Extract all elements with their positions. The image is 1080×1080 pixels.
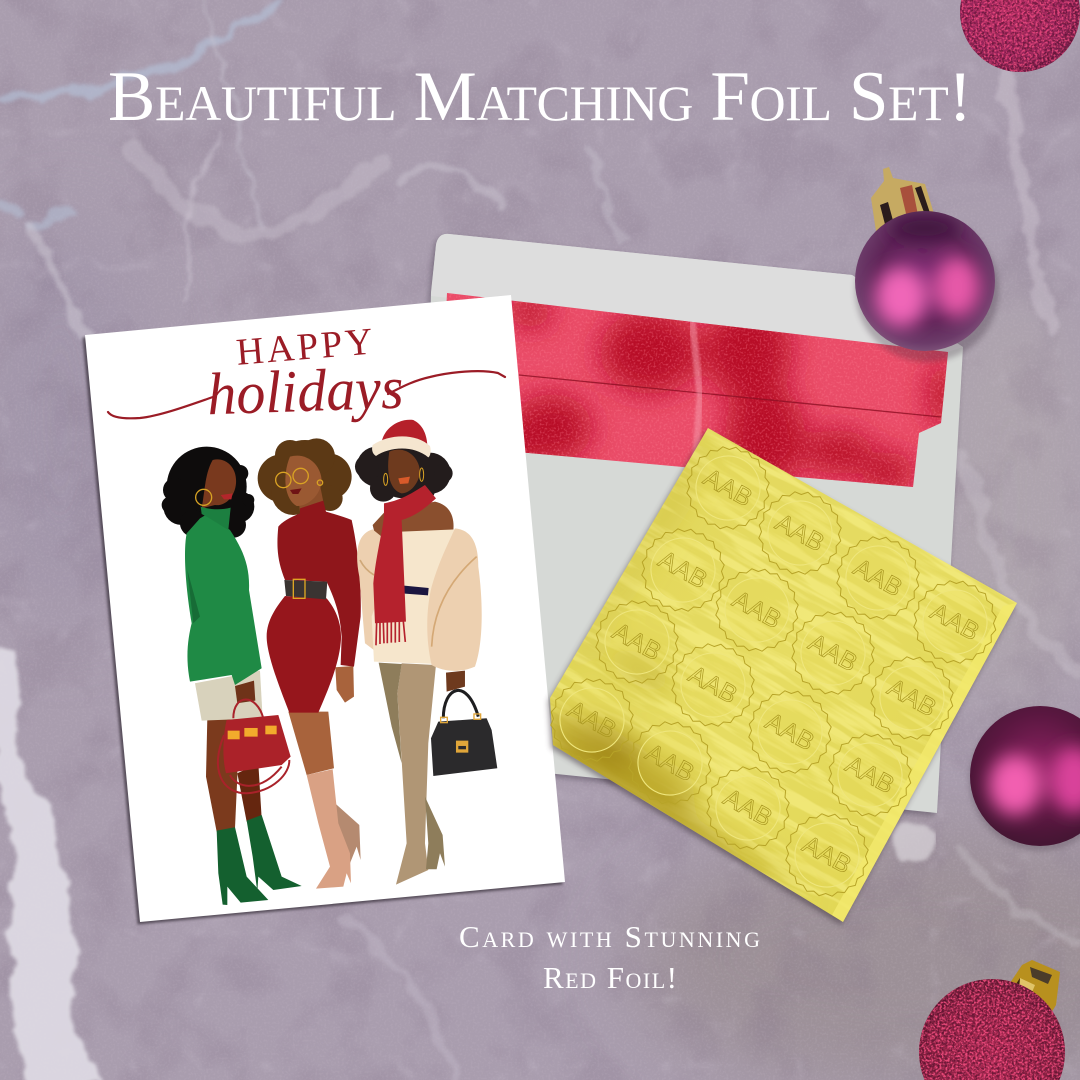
foil seals: AAB (841, 750, 899, 800)
card script: holidays (108, 355, 505, 427)
ornament: matte plum bauble right edge (969, 706, 1080, 851)
foil seals: AAB (608, 617, 666, 667)
woman in red dress (258, 438, 361, 889)
ornament: glitter bauble top right (960, 0, 1080, 72)
foil seals: AAB (641, 738, 699, 788)
foil seals: AAB (883, 673, 941, 723)
ornament: matte plum bauble (855, 167, 999, 362)
foil seals: AAB (699, 463, 757, 513)
greeting card (82, 295, 565, 924)
envelope (418, 234, 963, 816)
foil seals: AAB (728, 585, 786, 635)
caption: Red Foil! (543, 960, 677, 995)
ornament cap (871, 167, 935, 238)
foil seals: AAB (798, 830, 856, 880)
red foil envelope liner (446, 293, 948, 487)
ornament cap (1002, 960, 1060, 1018)
ornament: glitter bauble bottom right (915, 960, 1070, 1080)
white marble streak (0, 640, 105, 1080)
foil seals: AAB (563, 695, 621, 745)
gold foil seal sheet (544, 428, 1017, 926)
card script: holidays: holidays (206, 355, 404, 427)
foil seals: AAB (849, 553, 907, 603)
foil seals (536, 432, 1011, 911)
foil seals: AAB (719, 783, 777, 833)
woman in green (162, 447, 302, 905)
foil seals: AAB (926, 597, 984, 647)
illustration: three women (162, 420, 497, 905)
title: Beautiful Matching Foil Set! (108, 58, 972, 136)
foil seals: AAB (804, 628, 862, 678)
caption (459, 919, 760, 995)
foil seals: AAB (771, 508, 829, 558)
caption: Card with Stunning (459, 919, 760, 954)
card heading: Happy: HAPPY (235, 320, 377, 374)
foil seals: AAB (761, 707, 819, 757)
foil seals: AAB (654, 545, 712, 595)
woman in cream coat with santa hat (355, 420, 497, 885)
foil seals: AAB (684, 660, 742, 710)
